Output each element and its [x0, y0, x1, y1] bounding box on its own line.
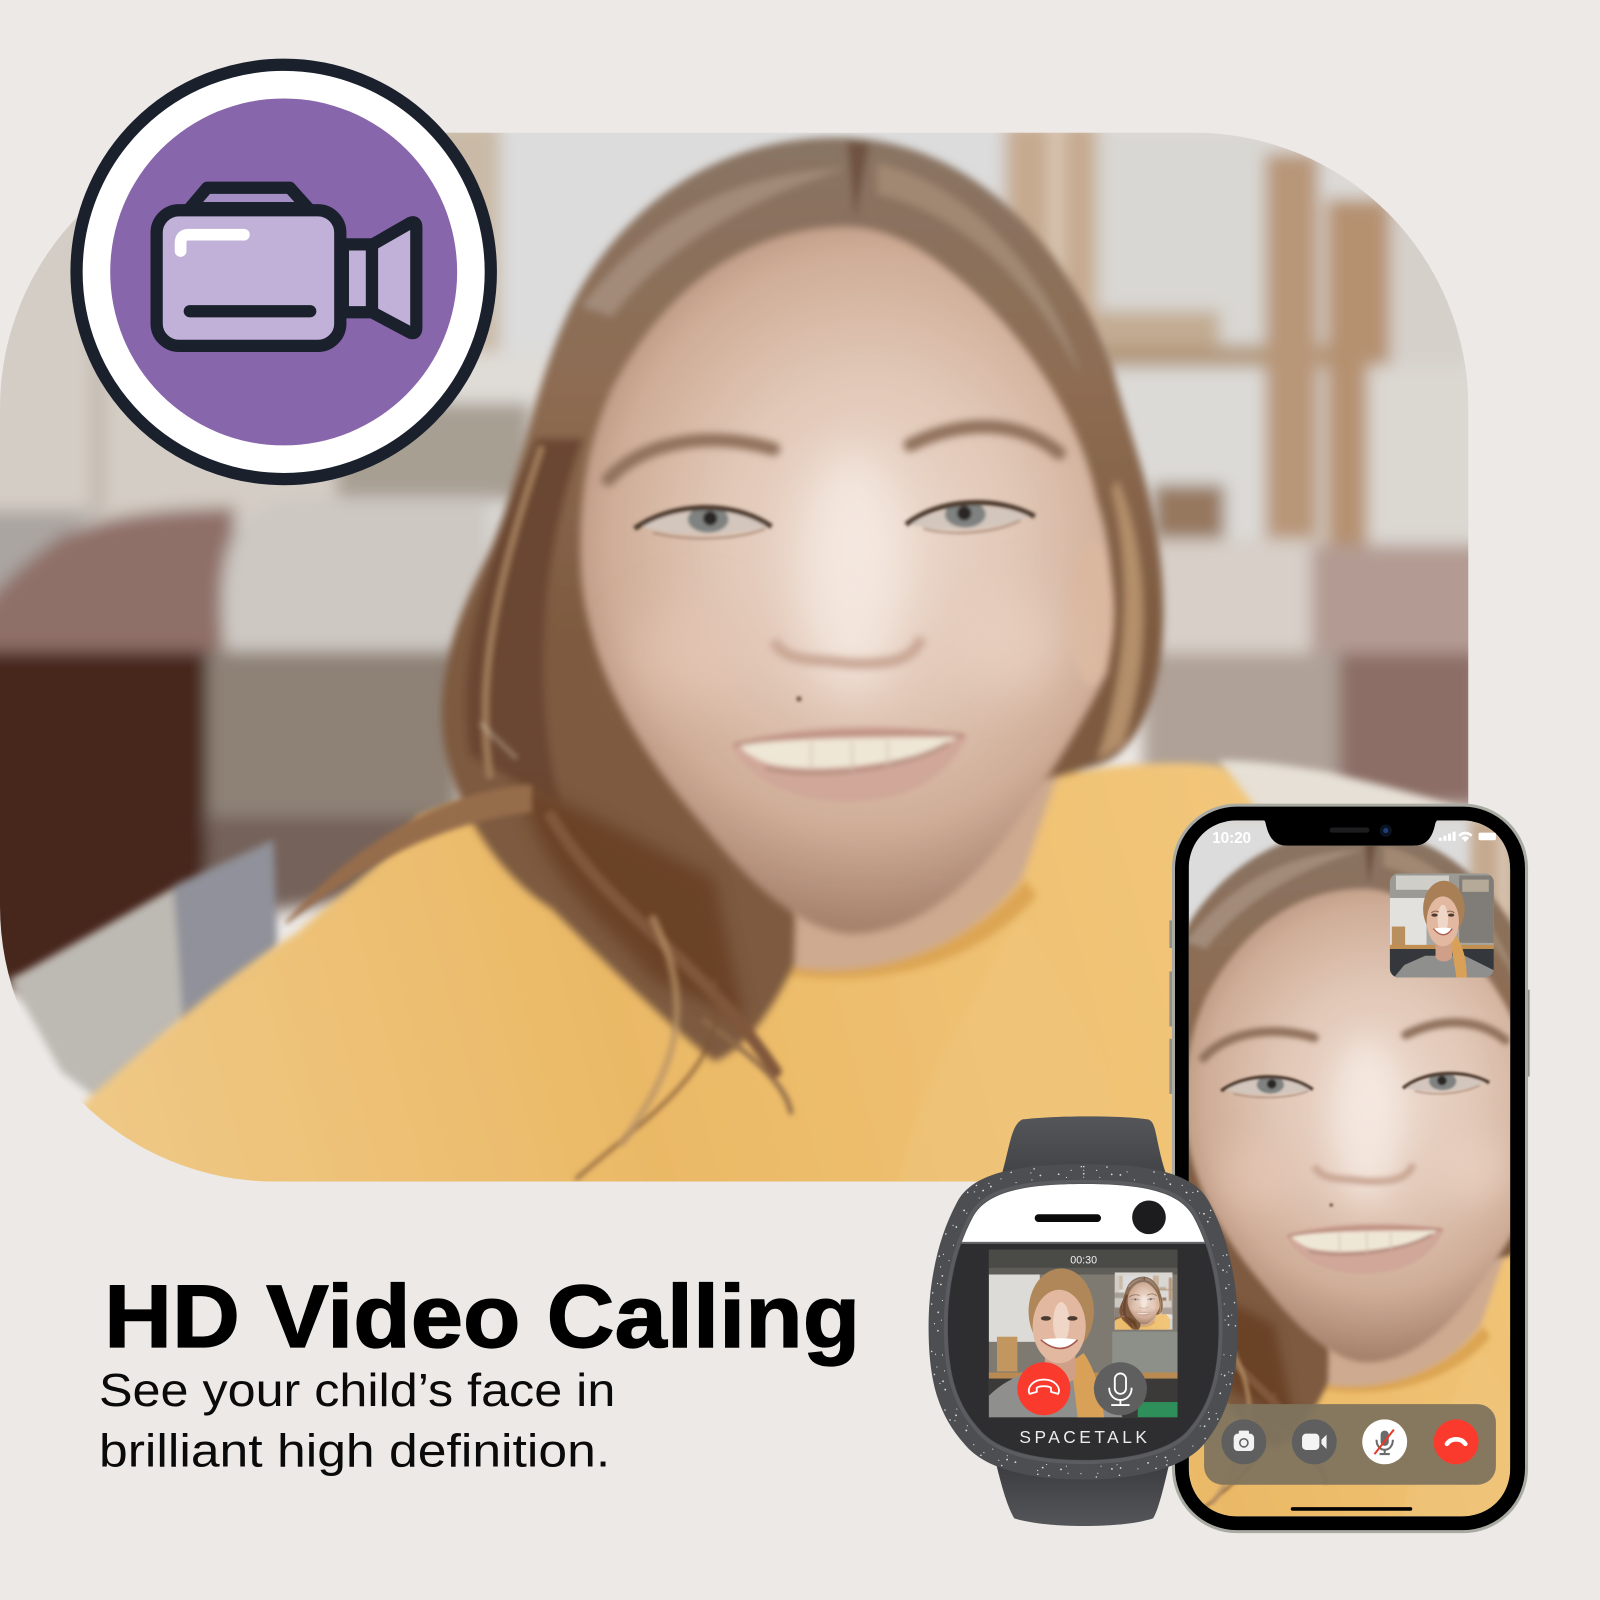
watch strap top: [999, 1116, 1169, 1184]
smartwatch: [929, 1116, 1238, 1526]
watch speaker slot: [1035, 1214, 1101, 1222]
sofa: plaid left: [0, 507, 235, 653]
watch video top band: [989, 1249, 1178, 1268]
mouth: [731, 727, 967, 802]
sofa: plaid right: [1143, 539, 1316, 656]
phone: [782, 805, 1600, 1540]
subheading: [99, 1364, 615, 1476]
phone side buttons: [1169, 920, 1530, 1094]
hair strands: [485, 449, 541, 776]
photo panel: girl on sofa: [0, 122, 1490, 1199]
eyebrows: [608, 440, 773, 480]
watch mic button: [1094, 1362, 1147, 1415]
subheading: brilliant high definition.: [99, 1424, 610, 1476]
watch face: [939, 1173, 1235, 1480]
notch speaker and camera: [1330, 824, 1392, 837]
subheading: See your child’s face in: [99, 1364, 615, 1416]
watch brand: SPACETALK: [1019, 1427, 1147, 1447]
watch case: [929, 1164, 1238, 1480]
picture-in-picture: mother: [1390, 873, 1494, 978]
status icons: [1439, 832, 1496, 842]
call controls bar: [1204, 1404, 1496, 1485]
watch case speckles: [931, 1167, 1235, 1477]
icon: video camera badge: [77, 65, 491, 479]
watch top white bezel: [939, 1173, 1235, 1243]
face: [580, 227, 1113, 934]
watch end call button: [1017, 1362, 1070, 1415]
face highlights: [801, 449, 903, 694]
hair: [442, 138, 1163, 1061]
home indicator: [1291, 1507, 1412, 1511]
right eye: [910, 507, 1029, 529]
watch call timer: 00:30: [1070, 1254, 1097, 1266]
mole: [796, 696, 802, 702]
heading: HD Video Calling: [104, 1267, 860, 1366]
end call button: [1434, 1419, 1479, 1464]
watch video: mother: [989, 1267, 1182, 1419]
lower hair shadow: [520, 786, 745, 1020]
left eye: [641, 511, 767, 534]
watch camera: [1132, 1201, 1166, 1234]
pillow: [10, 888, 184, 1102]
video button: [1292, 1419, 1337, 1464]
sweater: [41, 755, 1286, 1199]
mute button: [1362, 1419, 1407, 1464]
camera glyph: [157, 188, 416, 346]
flip camera button: [1221, 1419, 1266, 1464]
nose shadow: [773, 638, 921, 664]
status bar time: 10:20: [1212, 830, 1251, 847]
watch strap bottom: [994, 1454, 1171, 1526]
watch case inner rim: [946, 1182, 1221, 1462]
phone screen: video of girl: [782, 816, 1600, 1540]
neck: [704, 735, 1071, 970]
